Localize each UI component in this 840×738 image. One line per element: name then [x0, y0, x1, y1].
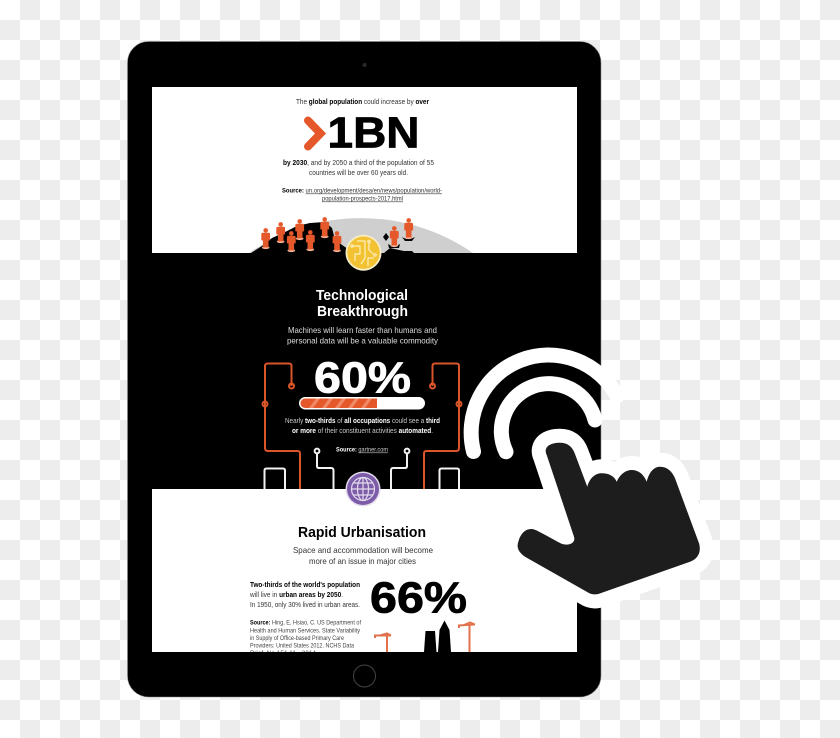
population source: Source: un.org/development/desa/en/news/population/world-	[282, 188, 442, 194]
population intro text: The global population could increase by over	[296, 99, 429, 106]
60 percent figure: 60%	[314, 354, 411, 402]
big number: more than 1 billion	[304, 116, 417, 150]
automation text: or more of their constituent activities automated.	[292, 426, 433, 435]
progress bar	[299, 397, 425, 410]
icon: people on the globe	[261, 217, 413, 252]
icon: pointing hand	[518, 443, 700, 594]
subheading	[293, 547, 433, 566]
population source: population-prospects-2017.html	[322, 196, 403, 202]
screen content	[152, 87, 577, 657]
heading: Rapid Urbanisation	[298, 525, 426, 541]
automation text	[286, 418, 440, 433]
population detail text	[283, 160, 434, 176]
heading: Technological	[316, 288, 408, 304]
population detail text: by 2030, and by 2050 a third of the population of 55	[283, 158, 434, 167]
urbanisation source: Providers: United States 2012. NCHS Data	[250, 644, 355, 650]
orange circuit lines	[262, 364, 462, 489]
panel: rapid urbanisation	[152, 489, 577, 657]
panel: technological breakthrough	[262, 289, 462, 489]
automation source: Source: gartner.com	[336, 448, 388, 454]
urbanisation source	[250, 620, 362, 652]
heading	[316, 288, 408, 320]
camera	[362, 63, 366, 67]
white circuit lines	[264, 449, 459, 489]
icon: tap signal arcs	[471, 355, 617, 452]
subheading: Space and accommodation will become	[293, 545, 433, 555]
heading: Breakthrough	[317, 304, 408, 320]
subheading: more of an issue in major cities	[309, 556, 416, 566]
icon: microchip badge	[346, 235, 382, 271]
urbanisation source: Health and Human Services. State Variability	[250, 628, 360, 634]
panel: population	[152, 87, 577, 253]
icon: city skyline	[374, 620, 475, 652]
urban population text: Two-thirds of the world's population	[250, 580, 360, 589]
automation text: Nearly two-thirds of all occupations could see a third	[285, 416, 440, 425]
icon: globe badge	[346, 472, 380, 506]
home button	[354, 665, 376, 687]
urbanisation source: Brief. No 151.11 - 2014	[250, 651, 317, 657]
urbanisation source: in Supply of Office-based Primary Care	[250, 636, 345, 642]
population source	[282, 188, 442, 202]
population detail text: countries will be over 60 years old.	[309, 168, 408, 177]
urban population text: In 1950, only 30% lived in urban areas.	[250, 600, 360, 609]
tablet body	[128, 42, 601, 697]
66 percent figure: 66%	[370, 574, 467, 622]
subheading	[288, 327, 438, 345]
urban population text	[249, 580, 360, 609]
urbanisation source: Source: Hing, E, Hsiao, C. US Department of	[250, 620, 361, 626]
globe landmass	[251, 222, 415, 253]
big number: more than 1 billion: 1BN	[328, 108, 420, 158]
globe hill	[249, 218, 473, 253]
urban population text: will live in urban areas by 2050.	[249, 590, 343, 599]
subheading: Machines will learn faster than humans and	[288, 325, 437, 335]
subheading: personal data will be a valuable commodity	[287, 336, 439, 346]
tablet screen	[152, 87, 577, 657]
